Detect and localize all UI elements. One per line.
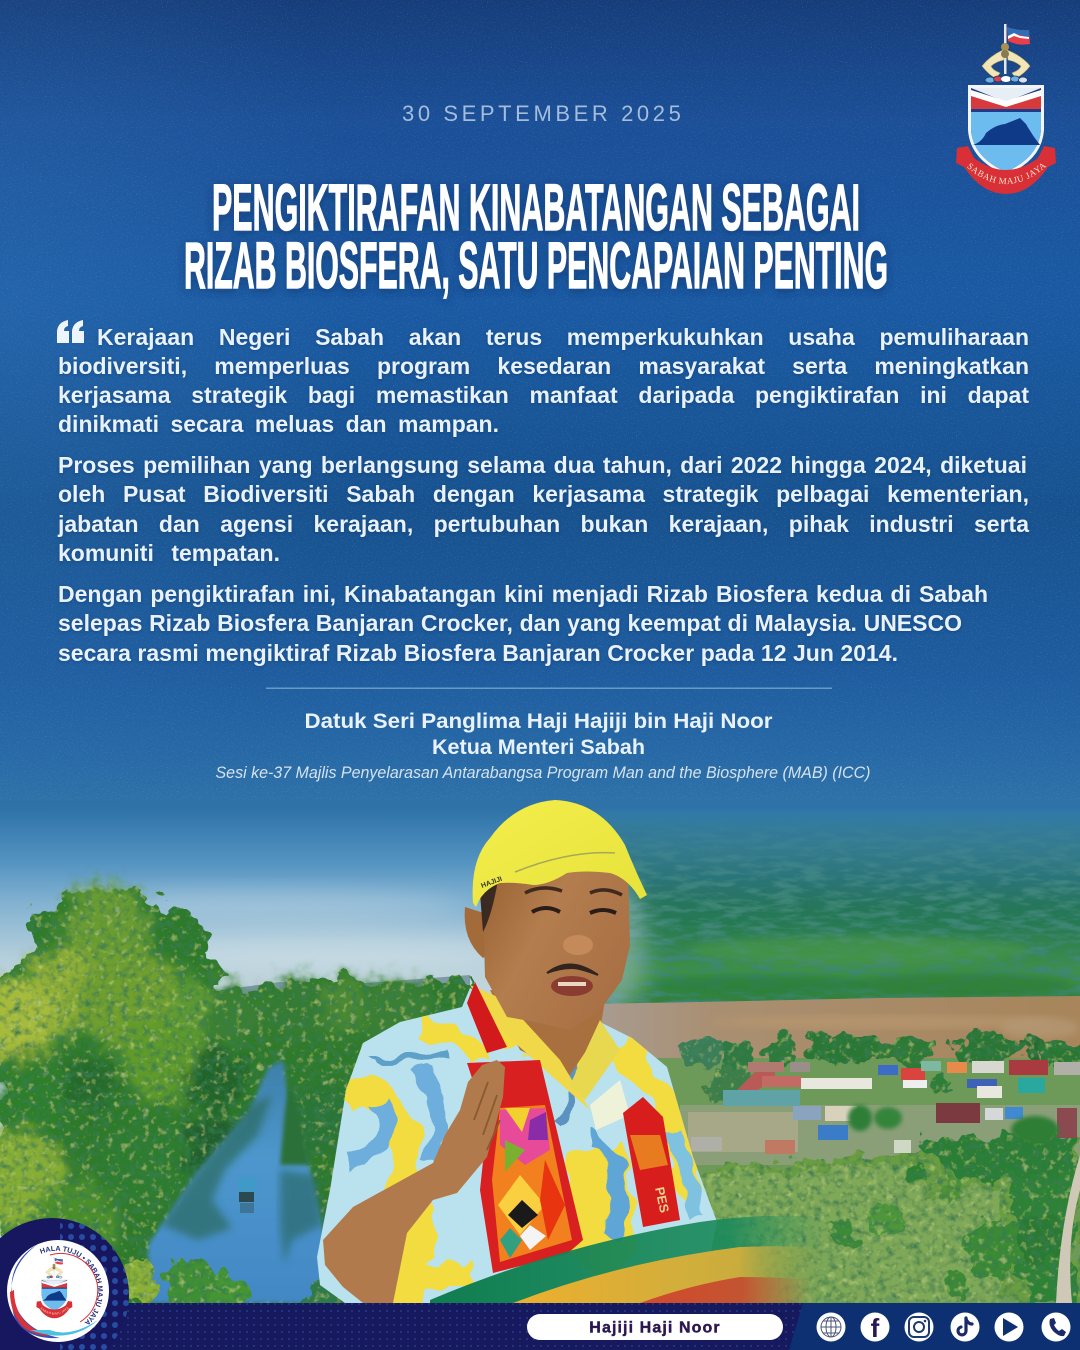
ear xyxy=(465,907,495,958)
shirt xyxy=(310,980,720,1305)
village bank and fields xyxy=(620,1058,1080,1303)
icon: facebook xyxy=(860,1312,890,1343)
icon: telephone xyxy=(1042,1312,1070,1342)
paragraph one: biodiversiti, memperluas program kesedaran masyarakat serta meningkatkan xyxy=(58,353,1029,379)
neck xyxy=(490,990,605,1075)
small crest xyxy=(36,1257,72,1318)
icon: youtube play xyxy=(994,1312,1024,1342)
icon: instagram xyxy=(904,1312,934,1342)
paragraph one: Kerajaan Negeri Sabah akan terus memperkukuhkan usaha pemuliharaan xyxy=(97,324,1029,350)
trees at the bottom of the forest river xyxy=(115,1257,336,1313)
paragraph three: Dengan pengiktirafan ini, Kinabatangan kini menjadi Rizab Biosfera kedua di Sabah xyxy=(58,581,988,607)
paragraph three: selepas Rizab Biosfera Banjaran Crocker, dan yang keempat di Malaysia. UNESCO xyxy=(58,610,962,636)
icon: website globe xyxy=(816,1312,846,1342)
name pill: Hajiji Haji Noor xyxy=(589,1320,721,1336)
far forest across the river xyxy=(604,820,1080,1004)
paragraph two: Proses pemilihan yang berlangsung selama dua tahun, dari 2022 hingga 2024, diketuai xyxy=(58,452,1027,478)
paragraph three xyxy=(58,581,988,668)
arms holding the pole xyxy=(982,50,1030,78)
eyes and brows xyxy=(525,888,562,893)
speaker role: Ketua Menteri Sabah xyxy=(432,736,645,759)
paragraph three: secara rasmi mengiktiraf Rizab Biosfera Banjaran Crocker pada 12 Jun 2014. xyxy=(58,640,898,666)
ribbon with motto xyxy=(956,146,1056,194)
footer bar xyxy=(0,1303,1080,1350)
paragraph two: komuniti tempatan. xyxy=(58,540,280,566)
bank trees and houses xyxy=(681,1032,1080,1303)
body text xyxy=(58,324,1030,668)
rainforest canopy xyxy=(0,883,480,1320)
date: 30 SEPTEMBER 2025 xyxy=(402,101,685,126)
banner flag xyxy=(430,1216,830,1303)
state crest: Sabah coat of arms xyxy=(956,24,1056,194)
right sash xyxy=(623,1097,680,1227)
event caption: Sesi ke-37 Majlis Penyelarasan Antarabangsa Program Man and the Biosphere (MAB) (ICC) xyxy=(216,763,870,782)
paragraph two: oleh Pusat Biodiversiti Sabah dengan kerjasama strategik pelbagai kementerian, xyxy=(58,481,1029,507)
paragraph two: jabatan dan agensi kerajaan, pertubuhan bukan kerajaan, pihak industri serta xyxy=(58,511,1029,537)
hair xyxy=(480,880,498,932)
cap xyxy=(473,800,647,907)
state crest: Sabah coat of arms: SABAH MAJU JAYA xyxy=(967,164,1046,184)
face xyxy=(482,868,630,1030)
mouth xyxy=(551,976,593,996)
signature divider xyxy=(266,688,832,689)
shield xyxy=(968,85,1044,175)
boat xyxy=(238,1177,255,1213)
portrait: Datuk Seri Panglima Haji Hajiji: PES xyxy=(652,1186,672,1214)
badge: Hala Tuju Sabah Maju Jaya xyxy=(0,1218,129,1350)
badge: Hala Tuju Sabah Maju Jaya: HALA TUJU • SABAH MAJU JAYA xyxy=(40,1246,103,1324)
forest river xyxy=(148,1060,330,1303)
mustache xyxy=(547,964,598,975)
icon: opening quotation mark xyxy=(57,320,84,343)
paragraph one: dinikmati secara meluas dan mampan. xyxy=(58,411,499,437)
portrait: Datuk Seri Panglima Haji Hajiji: HAJIJI xyxy=(480,876,503,890)
portrait: Datuk Seri Panglima Haji Hajiji xyxy=(310,800,720,1305)
red sash with woven pattern xyxy=(467,1060,583,1273)
paragraph two xyxy=(58,452,1030,567)
paragraph one: kerjasama strategik bagi memastikan manfaat daripada pengiktirafan ini dapat xyxy=(58,382,1029,408)
arm and hand xyxy=(323,1060,505,1303)
speaker name: Datuk Seri Panglima Haji Hajiji bin Haji Noor xyxy=(304,709,773,733)
flagpole and flag xyxy=(1004,24,1006,74)
title xyxy=(184,170,888,302)
wreath beads xyxy=(985,77,995,83)
name pill xyxy=(527,1314,783,1340)
brown river xyxy=(590,996,1080,1060)
red neck band xyxy=(467,982,507,1053)
icon: facebook: f xyxy=(871,1313,880,1343)
paragraph one xyxy=(58,324,1029,438)
icon: tiktok xyxy=(950,1312,980,1342)
